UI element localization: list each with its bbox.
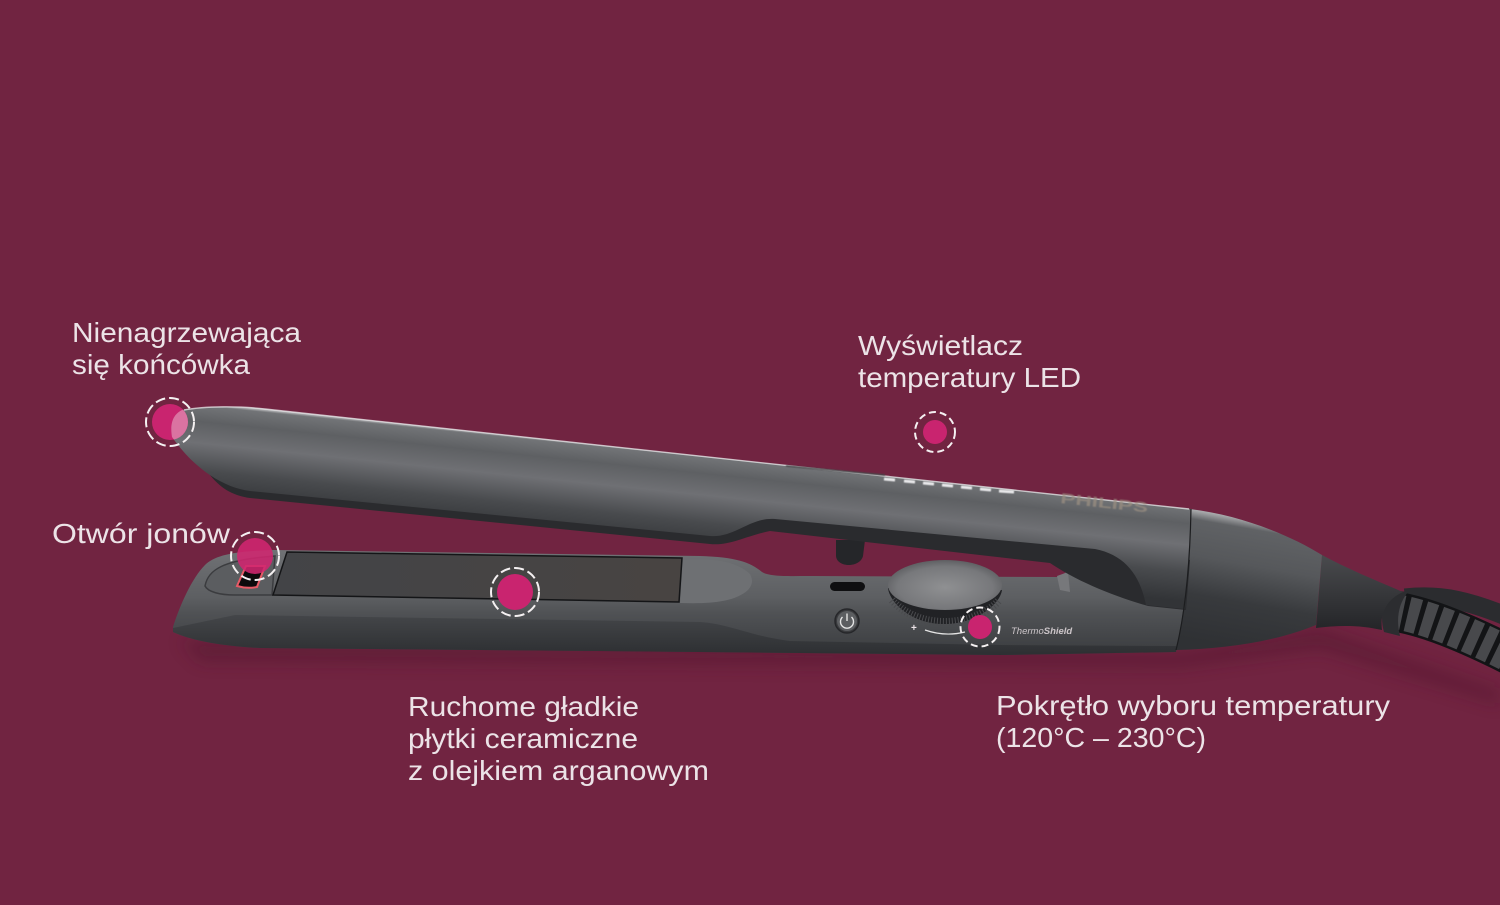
- label: ceramic plates: z olejkiem arganowym: [408, 755, 709, 786]
- label: ceramic plates: [408, 691, 709, 786]
- foot: [836, 540, 865, 565]
- infographic canvas: [54, 322, 1500, 786]
- temperature dial: [888, 560, 1002, 624]
- lower arm dark base: [173, 615, 1176, 655]
- floor shadow: [180, 628, 1500, 705]
- ion outlet: [237, 566, 265, 588]
- hinge: [1057, 572, 1070, 592]
- label: ion outlet: Otwór jonów: [52, 518, 231, 549]
- label: temperature dial: Pokrętło wyboru temperatury: [996, 690, 1390, 721]
- dial direction arrow: [911, 623, 965, 634]
- product: hair straightener: [171, 407, 1500, 705]
- hotspot: ceramic plates: [491, 568, 539, 616]
- label: temperature dial: (120°C – 230°C): [996, 722, 1206, 753]
- upper arm dark underside: [210, 475, 1190, 610]
- LED display strip: [786, 466, 1014, 492]
- upper arm highlight edge: [184, 407, 1189, 509]
- hotspot: non-heating tip: [146, 398, 194, 446]
- power cord: [1382, 590, 1500, 660]
- upper arm body: [171, 407, 1191, 609]
- ion outlet recess: [205, 556, 275, 595]
- label: ceramic plates: Ruchome gładkie: [408, 691, 639, 722]
- brand logo: PHILIPS: [1060, 490, 1149, 516]
- plate end cap: [680, 559, 752, 603]
- label: non-heating tip: Nienagrzewająca: [72, 317, 301, 348]
- icon: power button: [835, 609, 859, 633]
- label: temperature dial: [996, 690, 1390, 753]
- dial direction arrow: +: [911, 623, 917, 634]
- label: LED display: Wyświetlacz: [858, 330, 1023, 361]
- lower arm: [173, 550, 1190, 655]
- label: non-heating tip: [72, 317, 301, 380]
- neck: [1316, 555, 1403, 630]
- ThermoShield label: ThermoShield: [1011, 626, 1072, 637]
- hotspot: temperature dial: [960, 608, 1000, 646]
- upper arm: [171, 407, 1191, 650]
- handle: [1176, 509, 1322, 650]
- joint slit: [1176, 509, 1191, 650]
- label: non-heating tip: się końcówka: [72, 349, 250, 380]
- label: LED display: [858, 330, 1081, 393]
- label: ceramic plates: płytki ceramiczne: [408, 723, 638, 754]
- sensor slot: [830, 582, 865, 591]
- hotspot: ion outlet: [231, 532, 279, 580]
- hotspot: LED display: [915, 412, 955, 452]
- label: LED display: temperatury LED: [858, 362, 1081, 393]
- ceramic plate: [273, 552, 682, 602]
